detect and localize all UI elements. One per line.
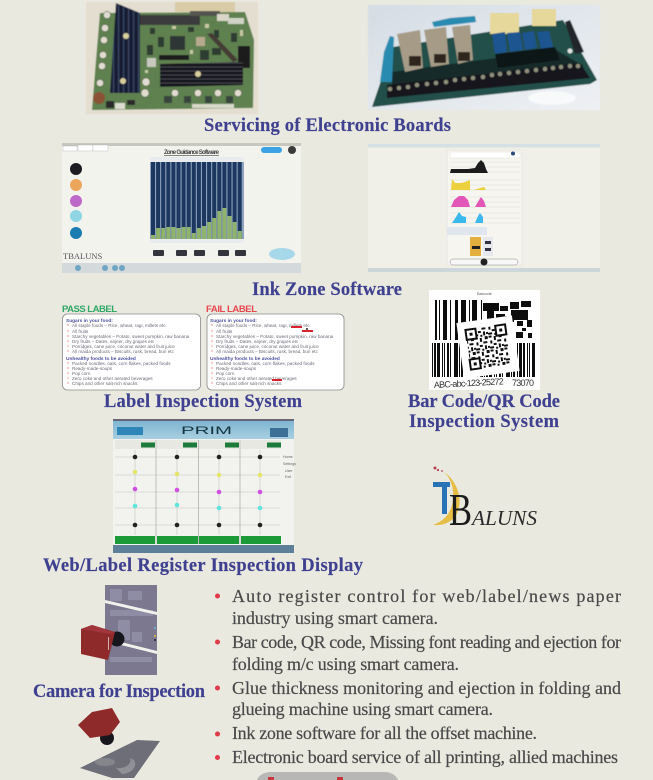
pass label card [62, 314, 200, 390]
screenshot: web register display: Home [283, 455, 293, 459]
barcode and QR code image: ABC-abc-123-25272 [434, 376, 504, 390]
bullet dots [215, 594, 220, 760]
logo swoosh [433, 472, 460, 525]
fail label text: Ready-made-soups [216, 366, 257, 371]
bullet: bar code: Bar code, QR code, Missing font reading and ejection for [232, 632, 621, 652]
fail label text: Packed noodles, oats, corn flakes, packed foods [216, 361, 315, 366]
fail label text: All fruits [216, 329, 233, 334]
screenshot: ink profile software [368, 144, 600, 272]
fail label text [210, 318, 334, 386]
pass label text: Starchy vegetables – Potato, sweet pumpkin, raw banana [72, 334, 190, 339]
logo wordmark: ALUNS [470, 506, 537, 530]
panel: fail label [206, 304, 344, 390]
pass label text: Unhealthy foods to be avoided [66, 356, 136, 362]
pass label text: All fruits [72, 329, 89, 334]
screenshot: web register display: Settings [283, 462, 296, 466]
fail label card [207, 314, 344, 390]
pass label text: Pop corn [72, 371, 91, 376]
pass label text: Ready-made-soups [72, 366, 113, 371]
heading: bar code: Inspection System [409, 412, 560, 432]
panel: pass label [62, 304, 200, 390]
pass label text: Chips and other salt-rich snacks [72, 381, 138, 386]
pass label text: All staple foods – Rice, wheat, ragi, millets etc [72, 323, 166, 328]
heading: ink zone: Ink Zone Software [252, 280, 402, 300]
barcode and QR code image: Barcode [477, 291, 493, 296]
fail label text: All staple foods – Rice, wheat, ragi, millets etc [216, 323, 310, 328]
pass label text: Porridges, cane juice, coconut water and fruit juice [72, 344, 175, 349]
heading: bar code: Bar Code/QR Code [408, 392, 560, 412]
pass label text: All maida products – Biscuits, rusk, bread, bun etc [72, 349, 175, 354]
screenshot: web register display: Exit [285, 475, 291, 479]
bullet: board service: Electronic board service of all printing, allied machines [232, 747, 618, 767]
photo: relay board [368, 5, 600, 110]
fail label text: Chips and other salt-rich snacks [216, 381, 282, 386]
fail label text: Sugars in your food: [210, 318, 257, 324]
pass label text: Packed noodles, oats, corn flakes, packed foods [72, 361, 171, 366]
screenshot: ink zone bar software: TBALUNS [63, 251, 102, 261]
bullet: glue: Glue thickness monitoring and ejection in folding and [232, 678, 621, 698]
fail label text: Zero coke and other aerated beverages [216, 376, 297, 381]
screenshot: web register display: PRIM [181, 425, 232, 437]
barcode and QR code image: 73070 [512, 378, 534, 388]
logo T letter [433, 482, 450, 514]
illustration: camera over plate [78, 708, 160, 778]
fail label text: Unhealthy foods to be avoided [210, 356, 280, 362]
fail label text: Dry fruits – Dates, anjeer, dry grapes etc [216, 339, 299, 344]
heading: bar code [408, 392, 560, 432]
fail label text: All maida products – Biscuits, rusk, bread, bun etc [216, 349, 319, 354]
pass label title: PASS LABEL [62, 304, 117, 315]
bottom pill button, cropped [257, 772, 398, 780]
heading: label inspection: Label Inspection System [104, 392, 303, 412]
pass label text: Dry fruits – Dates, anjeer, dry grapes etc [72, 339, 155, 344]
bullet: bar code line two: folding m/c using smart camera. [232, 654, 459, 674]
fail label title: FAIL LABEL [206, 304, 257, 315]
logo red dots [434, 466, 443, 472]
screenshot: web register display: User [285, 469, 293, 473]
barcode and QR code image [429, 290, 540, 390]
bullet: auto register line two: industry using smart camera. [232, 608, 438, 628]
bullet: ink zone: Ink zone software for all the offset machine. [232, 723, 537, 743]
screenshot: ink zone bar software: Zone Guidance Software [164, 150, 220, 156]
heading: camera: Camera for Inspection [33, 682, 206, 702]
bullet: glue line two: glueing machine using smart camera. [232, 699, 493, 719]
heading: servicing: Servicing of Electronic Boards [204, 116, 451, 136]
heading: web/label register: Web/Label Register Inspection Display [43, 556, 364, 576]
red defect marks [272, 326, 313, 381]
pass label text: Sugars in your food: [66, 318, 113, 324]
fail label text: Starchy vegetables – Potato, sweet pumpkin, raw banana [216, 334, 334, 339]
bullet: auto register: Auto register control for web/label/news paper [232, 586, 621, 606]
photo: electronic board with heat sinks [86, 2, 258, 114]
logo B letter: B [449, 485, 472, 535]
illustration: camera over printed sheet [81, 585, 157, 675]
pass label text [66, 318, 190, 386]
screenshot: ink zone bar software [62, 143, 301, 273]
fail label text: Porridges, cane juice, coconut water and fruit juice [216, 344, 319, 349]
logo: T B Baluns [433, 466, 537, 535]
screenshot: web register display [113, 419, 296, 553]
fail label text: Pop corn [216, 371, 235, 376]
bullet list [215, 586, 621, 767]
pass label text: Zero coke and other aerated beverages [72, 376, 153, 381]
